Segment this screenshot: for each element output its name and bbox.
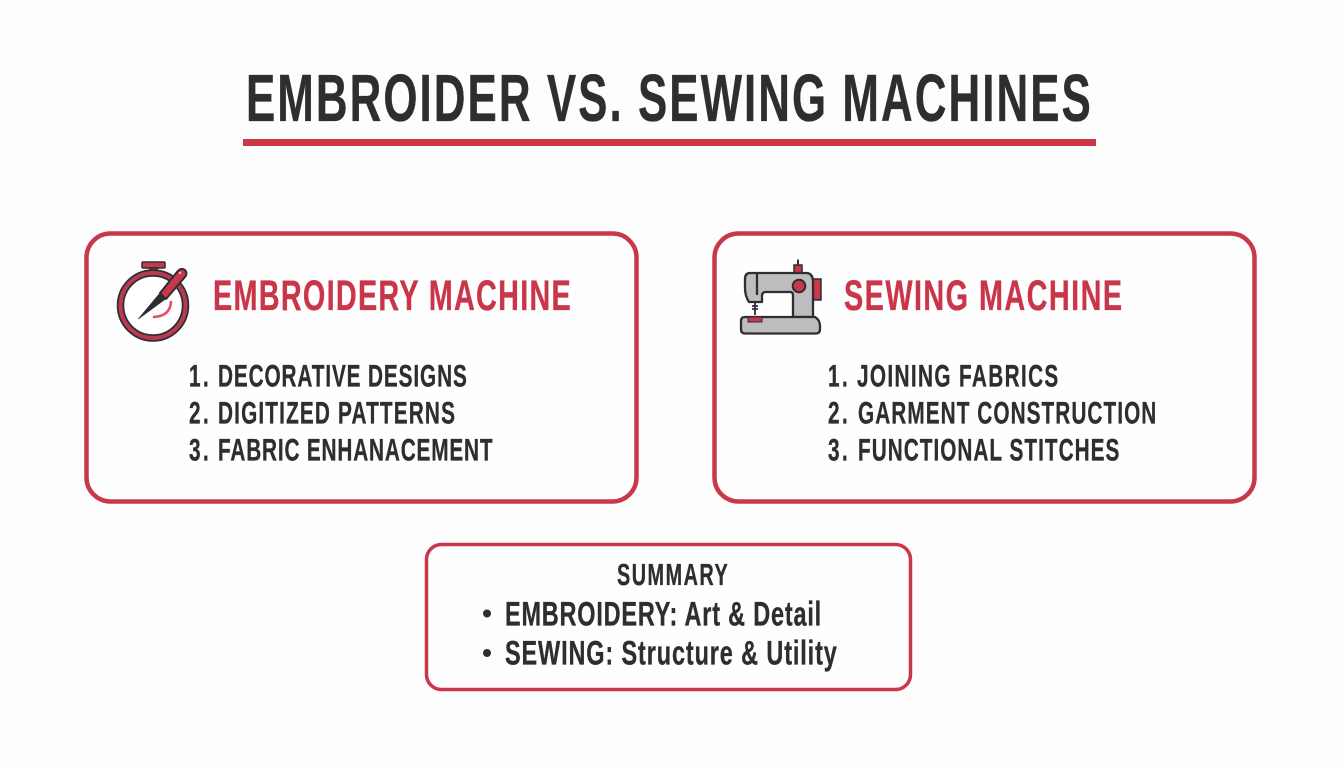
list: embroidery features [189, 358, 493, 468]
list: sewing features: 3. [828, 432, 848, 468]
icon: sewing machine [741, 260, 821, 334]
icon: stopwatch with needle [120, 262, 186, 338]
summary heading: SUMMARY [617, 556, 728, 592]
list: embroidery features: 2. [189, 395, 209, 431]
list: sewing features [828, 358, 1156, 468]
panel: sewing machine [714, 234, 1254, 502]
heading: sewing machine: SEWING MACHINE [844, 271, 1122, 319]
title underline [243, 139, 1096, 146]
summary bullets: EMBROIDERY: Art & Detail [505, 595, 821, 634]
list: embroidery features: FABRIC ENHANACEMENT [218, 432, 493, 468]
list: embroidery features: 1. [189, 358, 209, 394]
panel: summary [426, 544, 910, 690]
list: embroidery features: DECORATIVE DESIGNS [218, 358, 467, 394]
heading: embroidery machine: EMBROIDERY MACHINE [213, 271, 571, 319]
list: sewing features: 2. [828, 395, 848, 431]
list: sewing features: GARMENT CONSTRUCTION [858, 395, 1156, 431]
list: sewing features: 1. [828, 358, 848, 394]
list: embroidery features: 3. [189, 432, 209, 468]
summary bullets [483, 595, 837, 672]
panel: embroidery machine [86, 234, 636, 502]
summary bullets: SEWING: Structure & Utility [505, 634, 837, 672]
list: sewing features: FUNCTIONAL STITCHES [858, 432, 1119, 468]
list: embroidery features: DIGITIZED PATTERNS [218, 395, 455, 431]
title: EMBROIDER VS. SEWING MACHINES [246, 61, 1091, 135]
list: sewing features: JOINING FABRICS [857, 358, 1058, 394]
